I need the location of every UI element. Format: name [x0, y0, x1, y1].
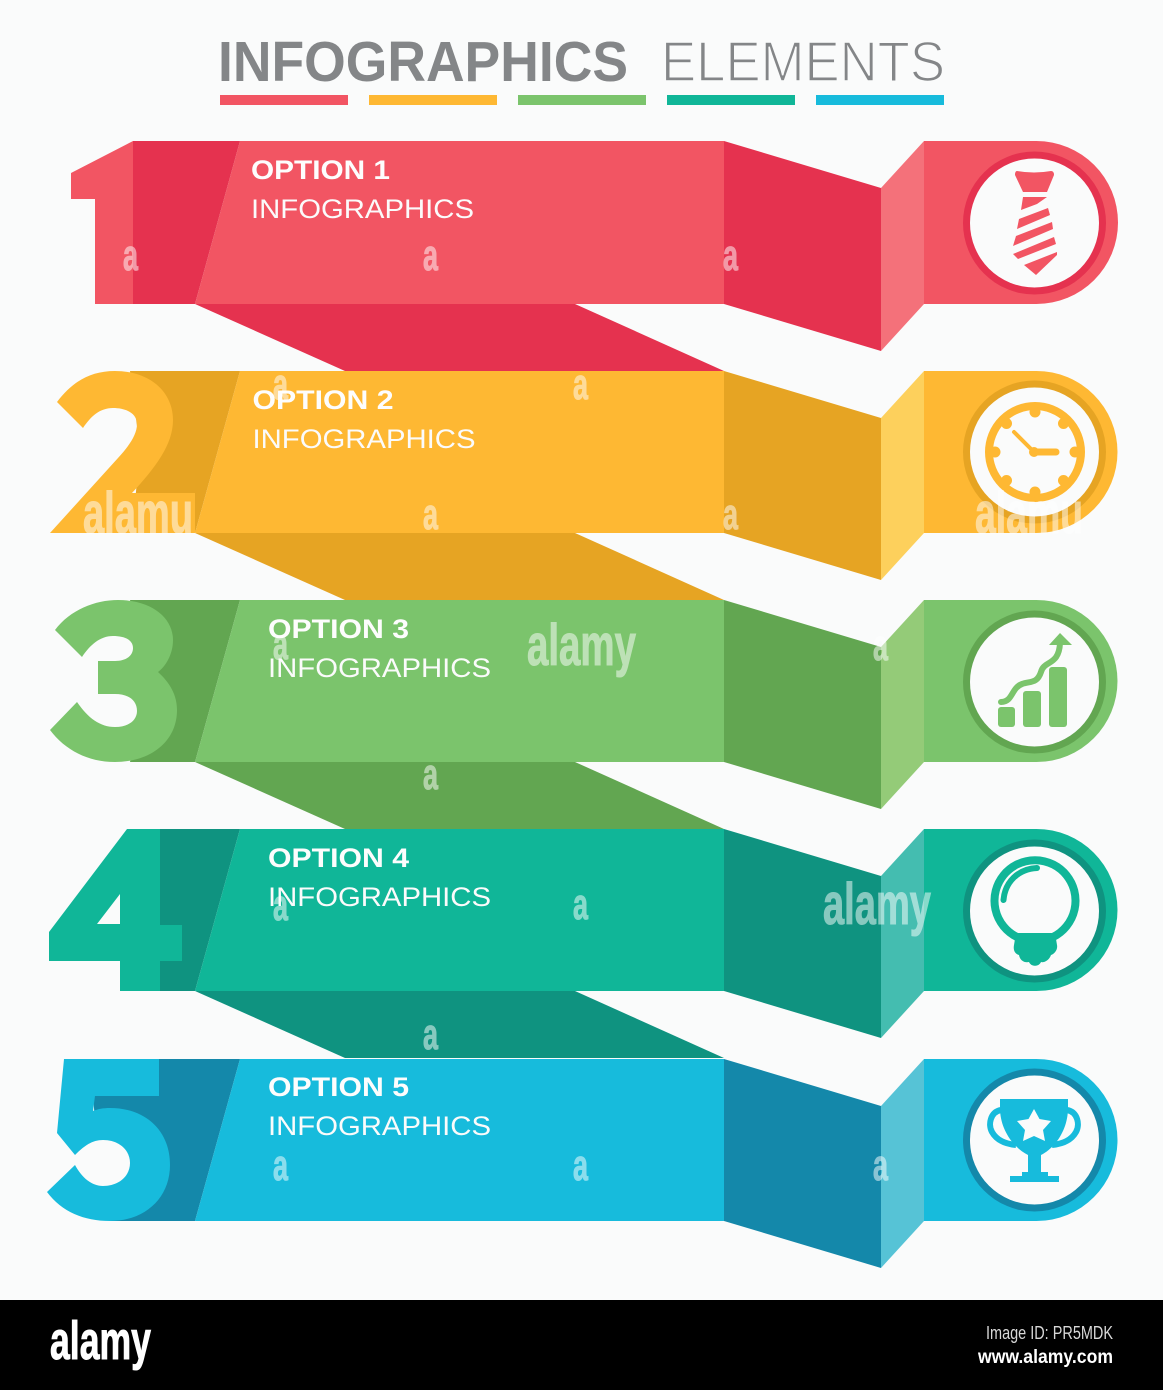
watermarks: alamy [527, 613, 636, 678]
option 5 main band [195, 1059, 724, 1221]
option 4 under fold [195, 991, 724, 1058]
option 4 label: INFOGRAPHICS [268, 882, 491, 912]
panel: option 5 [47, 1059, 1118, 1268]
watermarks: a [723, 231, 738, 280]
number 1 [71, 141, 133, 304]
panel: option 4 [49, 829, 1118, 1058]
watermarks: alamu [975, 481, 1083, 546]
watermarks: a [273, 1141, 288, 1190]
option 1 left fold [133, 141, 240, 304]
option 1 light fold [881, 141, 924, 351]
panel: option 1 [71, 141, 1118, 371]
option 1 under fold [195, 304, 724, 371]
title: ELEMENTS [661, 30, 945, 94]
option 4 cap [924, 829, 1118, 991]
option 3 main band [195, 600, 724, 762]
watermarks: alamy [823, 872, 931, 937]
footer logo: alamy [50, 1311, 151, 1371]
option 2 under fold [195, 533, 724, 600]
option 5 cap [924, 1059, 1118, 1221]
option 2 cap [924, 371, 1118, 533]
panel: option 3 [50, 600, 1118, 829]
option 3 cap [924, 600, 1118, 762]
number 5 [47, 1059, 170, 1221]
number 4 [49, 829, 182, 991]
title: INFOGRAPHICS [218, 30, 628, 94]
option 3 under fold [195, 762, 724, 829]
option 1 right fold [724, 141, 881, 351]
option 3 left fold [130, 600, 240, 762]
option 4 light fold [881, 829, 924, 1038]
option 5 label: INFOGRAPHICS [268, 1111, 491, 1141]
option 2 right fold [724, 371, 881, 580]
option 3 right fold [724, 600, 881, 809]
number 2 [50, 371, 195, 533]
footer image id: Image ID: PR5MDK [986, 1323, 1113, 1343]
option 1 label: INFOGRAPHICS [251, 194, 474, 224]
watermarks: a [273, 881, 288, 930]
watermarks: a [873, 1141, 888, 1190]
option 5 label: OPTION 5 [268, 1072, 409, 1102]
watermarks: a [723, 490, 738, 539]
option 3 label: INFOGRAPHICS [268, 653, 491, 683]
option 2 light fold [881, 371, 924, 580]
option 2 label [252, 385, 476, 454]
icon: growth chart [963, 610, 1106, 754]
title [218, 30, 945, 94]
option 4 label: OPTION 4 [268, 843, 409, 873]
watermarks: a [273, 360, 288, 409]
watermarks: alamu [83, 481, 193, 546]
option 4 label [268, 843, 491, 912]
option 4 right fold [724, 829, 881, 1038]
title colour bars [220, 95, 944, 105]
option 1 cap [924, 141, 1118, 304]
option 3 label: OPTION 3 [268, 614, 409, 644]
option 3 label [268, 614, 491, 683]
icon: light bulb [963, 840, 1106, 982]
watermarks: a [573, 880, 588, 929]
option 5 label [268, 1072, 491, 1141]
footer url: www.alamy.com [977, 1347, 1113, 1368]
panel: option 2 [50, 371, 1118, 600]
number 3 [50, 600, 177, 762]
watermarks: a [423, 750, 438, 799]
option 5 light fold [881, 1059, 924, 1268]
icon: trophy [963, 1068, 1106, 1212]
option 5 left fold [93, 1059, 240, 1221]
option 4 left fold [160, 829, 240, 991]
icon: clock [963, 380, 1106, 524]
watermarks: a [873, 621, 888, 670]
option 2 label: INFOGRAPHICS [252, 424, 476, 454]
option 2 main band [195, 371, 724, 533]
watermarks: a [123, 231, 138, 280]
option 1 label: OPTION 1 [251, 155, 390, 185]
watermarks: a [573, 1141, 588, 1190]
option 1 main band [195, 141, 724, 304]
footer bar [0, 1300, 1163, 1390]
option 2 label: OPTION 2 [252, 385, 394, 415]
option 3 light fold [881, 600, 924, 809]
option 4 main band [195, 829, 724, 991]
option 2 left fold [130, 371, 240, 533]
watermarks: a [423, 490, 438, 539]
icon: tie [963, 152, 1106, 294]
watermarks: a [573, 360, 588, 409]
option 1 label [251, 155, 474, 224]
watermarks: a [273, 620, 288, 669]
watermarks: a [423, 1010, 438, 1059]
watermarks: a [423, 231, 438, 280]
option 5 right fold [724, 1059, 881, 1268]
watermarks [83, 231, 1083, 1190]
